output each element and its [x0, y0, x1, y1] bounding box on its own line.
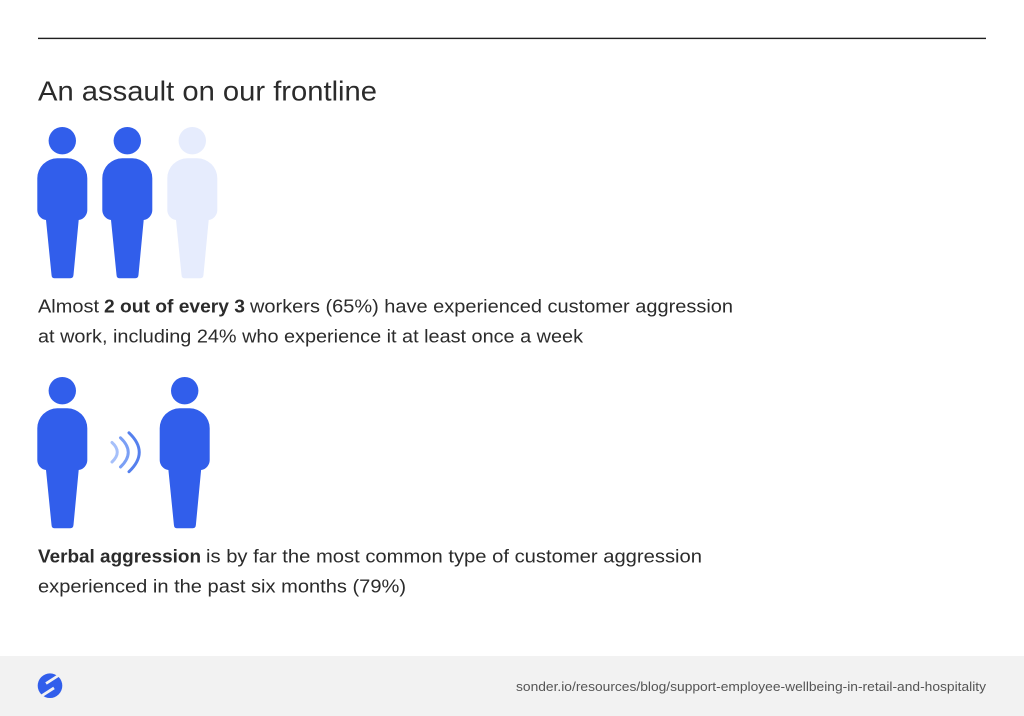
footer band [0, 656, 1024, 716]
icon: speaker [37, 377, 87, 528]
text block: verbal aggression [38, 546, 702, 596]
text block: two out of three workers: 2 out of every 3 [104, 296, 245, 316]
text block: verbal aggression: Verbal aggression [38, 546, 201, 566]
text block: two out of three workers: at work, including 24% who experience it at least once a week [38, 325, 584, 346]
footer url: sonder.io/resources/blog/support-employee-wellbeing-in-retail-and-hospitality [516, 680, 987, 694]
text block: verbal aggression: is by far the most common type of customer aggression [206, 546, 702, 566]
text block: two out of three workers: workers (65%) have experienced customer aggression [249, 296, 733, 316]
icon: sound waves [112, 433, 139, 472]
text block: two out of three workers: Almost [38, 296, 99, 316]
icon: person 2 [102, 127, 152, 278]
text block: two out of three workers [38, 296, 733, 346]
text block: verbal aggression: experienced in the past six months (79%) [38, 575, 406, 596]
icon: three people, two of three highlighted [37, 127, 217, 278]
icon: listener [160, 377, 210, 528]
icon: person 3 faded [167, 127, 217, 278]
icon: person 1 [37, 127, 87, 278]
title: An assault on our frontline [38, 76, 377, 106]
icon: two people with speech waves [37, 377, 210, 528]
icon: sonder logo [38, 673, 62, 698]
